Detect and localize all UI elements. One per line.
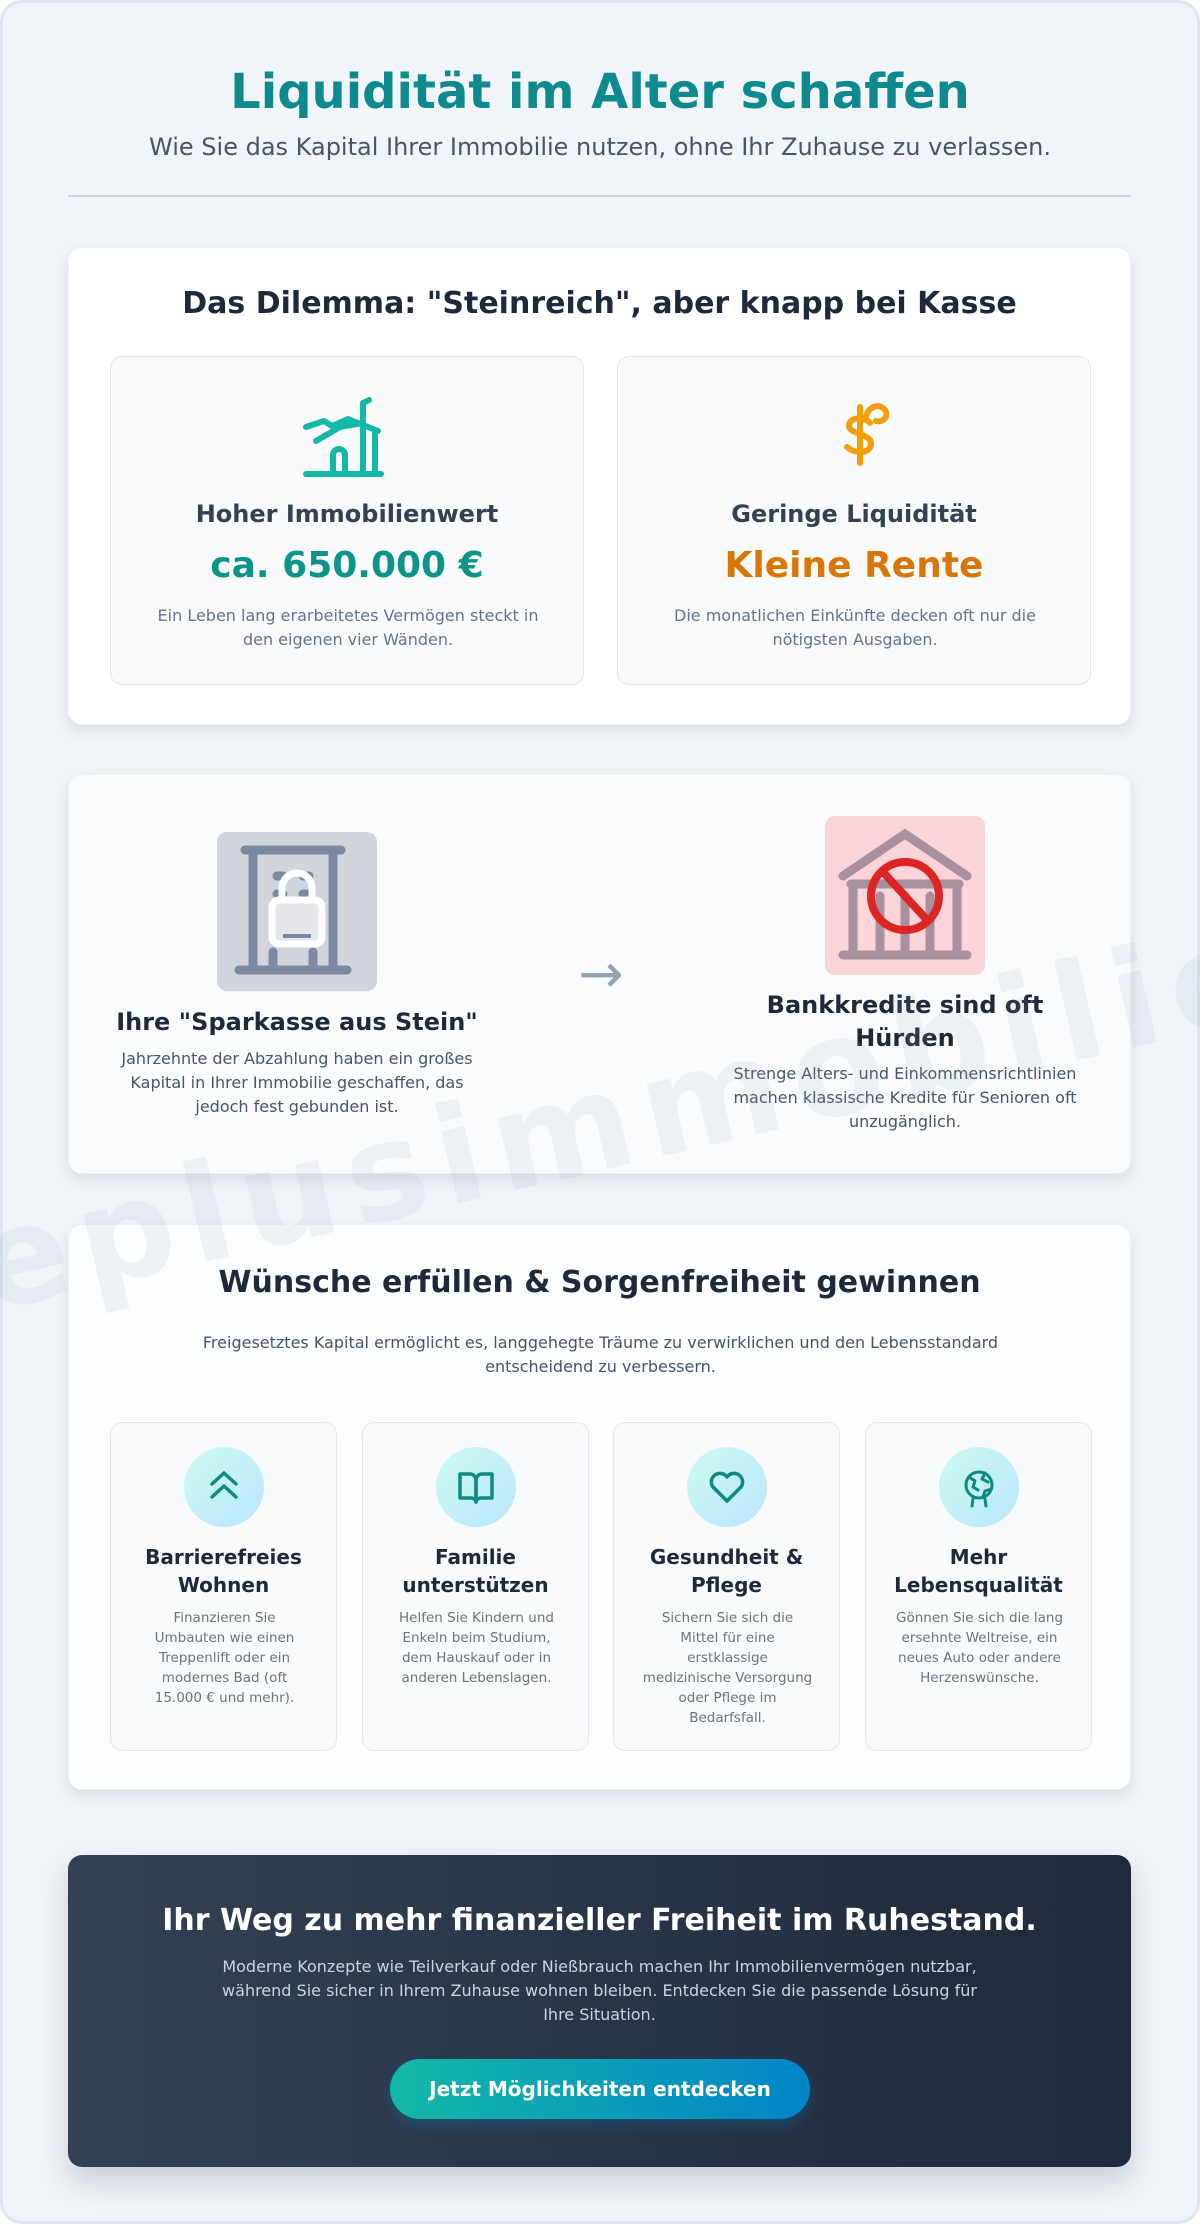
icon: globe xyxy=(938,1447,1018,1527)
box: familie: Helfen Sie Kindern und xyxy=(399,1610,554,1626)
panel: call to action xyxy=(68,1855,1131,2167)
text: hoher immobilienwert: Hoher Immobilienwert xyxy=(196,500,498,528)
button: Jetzt Möglichkeiten entdecken xyxy=(429,2077,771,2101)
box: gesundheit: Gesundheit & xyxy=(650,1545,803,1569)
desc: 15.000 € und mehr). xyxy=(155,1690,294,1706)
box: gesundheit: Mittel für eine xyxy=(680,1630,775,1646)
desc xyxy=(155,1610,294,1706)
box: gesundheit: Sichern Sie sich die xyxy=(662,1610,793,1626)
heading: Wünsche erfüllen & Sorgenfreiheit gewinnen xyxy=(218,1265,981,1300)
text: sparkasse aus stein: Ihre "Sparkasse aus Stein" xyxy=(116,1008,478,1036)
value: 650000: ca. 650.000 € xyxy=(210,545,484,586)
title xyxy=(145,1545,302,1597)
box: lebensqualitaet: Gönnen Sie sich die lang xyxy=(896,1610,1063,1626)
box: familie: unterstützen xyxy=(402,1573,549,1597)
box: immobilienwert xyxy=(110,356,584,685)
box: familie: Enkeln beim Studium, xyxy=(402,1630,551,1646)
box: barrierefrei xyxy=(110,1422,337,1751)
panel: problem xyxy=(68,774,1131,1174)
box: familie: anderen Lebenslagen. xyxy=(402,1670,551,1686)
title: Barrierefreies xyxy=(145,1545,302,1569)
desc: den eigenen vier Wänden. xyxy=(243,630,453,649)
box: lebensqualitaet xyxy=(865,1422,1092,1751)
box: gesundheit xyxy=(613,1422,840,1751)
panel: dilemma xyxy=(68,247,1131,725)
box: gesundheit: Pflege xyxy=(691,1573,762,1597)
icon: book xyxy=(436,1447,516,1527)
box: gesundheit: erstklassige xyxy=(687,1650,768,1666)
desc: Finanzieren Sie xyxy=(173,1610,276,1626)
box: liquiditaet xyxy=(617,356,1091,685)
cta heading: Ihr Weg zu mehr finanzieller Freiheit im Ruhestand. xyxy=(162,1903,1037,1938)
text: bankkredite: Hürden xyxy=(855,1024,955,1052)
cta text: Moderne Konzepte wie Teilverkauf oder Nießbrauch machen Ihr Immobilienvermögen nutzbar, während Sie sicher in Ihrem Zuhause wohnen bleiben. Entdecken Sie die passende Lösung für Ihre Situation. xyxy=(222,1957,977,2024)
icon: dollar xyxy=(844,403,890,466)
box: familie xyxy=(362,1422,589,1751)
panel: wishes xyxy=(68,1224,1131,1790)
desc: Umbauten wie einen xyxy=(155,1630,294,1646)
box: lebensqualitaet: Lebensqualität xyxy=(894,1573,1063,1597)
desc xyxy=(158,606,538,649)
icon: locked stone bank xyxy=(217,832,377,991)
icon: house chart xyxy=(302,397,384,477)
heading: dilemma: Das Dilemma: "Steinreich", aber knapp bei Kasse xyxy=(182,286,1017,321)
subtitle: Wie Sie das Kapital Ihrer Immobilie nutzen, ohne Ihr Zuhause zu verlassen. xyxy=(149,133,1051,161)
box: lebensqualitaet: Mehr xyxy=(950,1545,1007,1569)
text: geringe liquiditaet: Geringe Liquidität xyxy=(731,500,977,528)
box: gesundheit: medizinische Versorgung xyxy=(643,1670,812,1686)
box: gesundheit: Bedarfsfall. xyxy=(689,1710,766,1726)
desc: modernes Bad (oft xyxy=(162,1670,287,1686)
box: lebensqualitaet: ersehnte Weltreise, ein xyxy=(902,1630,1057,1646)
box: lebensqualitaet: neues Auto oder andere xyxy=(898,1650,1061,1666)
desc: Strenge Alters- und Einkommensrichtlinien machen klassische Kredite für Senioren oft unzugänglich. xyxy=(733,1064,1077,1131)
icon: chevrons up xyxy=(184,1447,264,1527)
icon: bank forbidden xyxy=(825,816,985,975)
intro text: Freigesetztes Kapital ermöglicht es, langgehegte Träume zu verwirklichen und den Lebensstandard entscheidend zu verbessern. xyxy=(203,1333,998,1376)
icon: heart xyxy=(686,1447,766,1527)
title: Liquidität im Alter schaffen xyxy=(230,64,970,120)
value: kleine rente: Kleine Rente xyxy=(725,545,983,586)
arrow: → xyxy=(578,942,624,1005)
box: familie: dem Hauskauf oder in xyxy=(402,1650,551,1666)
box: familie: Familie xyxy=(435,1545,516,1569)
desc: Treppenlift oder ein xyxy=(159,1650,290,1666)
box: gesundheit: oder Pflege im xyxy=(678,1690,776,1706)
text: bankkredite xyxy=(767,991,1043,1052)
title: Wohnen xyxy=(178,1573,269,1597)
text: bankkredite: Bankkredite sind oft xyxy=(767,991,1043,1019)
desc: Ein Leben lang erarbeitetes Vermögen steckt in xyxy=(158,606,538,625)
desc: Jahrzehnte der Abzahlung haben ein großes Kapital in Ihrer Immobilie geschaffen, das jedoch fest gebunden ist. xyxy=(121,1049,473,1116)
box: lebensqualitaet: Herzenswünsche. xyxy=(920,1670,1039,1686)
button xyxy=(390,2059,810,2119)
desc: Die monatlichen Einkünfte decken oft nur die nötigsten Ausgaben. xyxy=(674,606,1036,649)
